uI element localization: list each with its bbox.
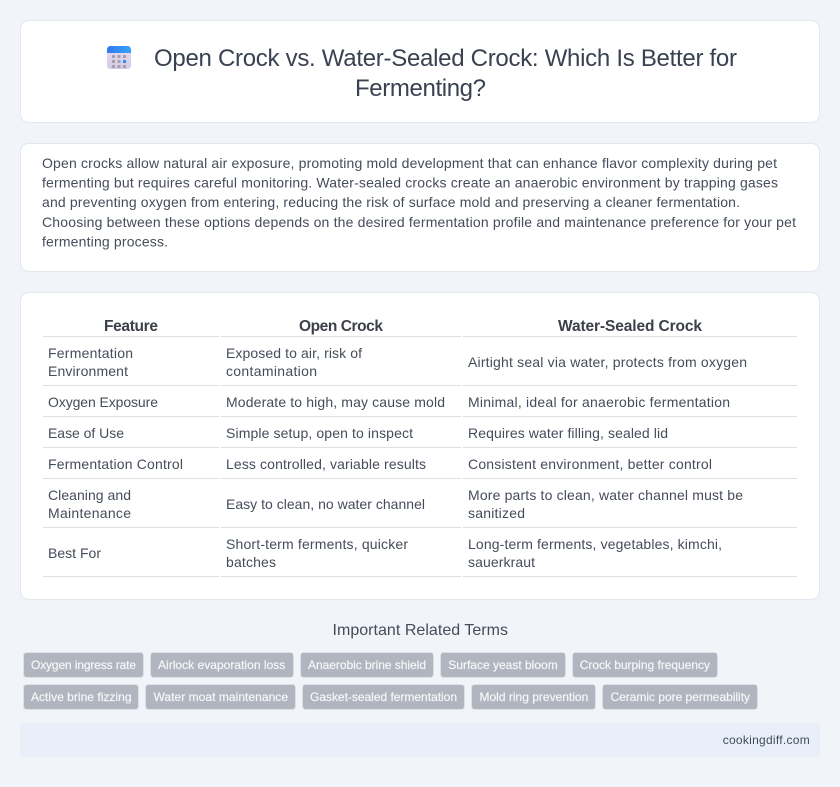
title: Open Crock vs. Water-Sealed Crock: Which Is Better for: [154, 45, 737, 72]
row: fermentation control: [43, 456, 797, 479]
title: [154, 45, 737, 102]
row: best for: batches: [226, 554, 276, 570]
summary text: [42, 155, 796, 249]
row: ease of use: [43, 425, 797, 448]
row: fermentation environment: Fermentation: [48, 345, 133, 361]
summary text: and preventing oxygen from entering, reducing the risk of surface mold and preserving a cleaner fermentation.: [42, 194, 740, 210]
summary text: fermenting process.: [42, 233, 168, 249]
row: best for: Long-term ferments, vegetables, kimchi,: [468, 536, 722, 552]
tag: anaerobic brine shield: [300, 652, 434, 678]
header panel: [20, 20, 820, 122]
row: cleaning and maintenance: Easy to clean, no water channel: [226, 496, 425, 512]
tag: gasket-sealed fermentation: [302, 684, 464, 710]
tag: anaerobic brine shield: Anaerobic brine shield: [308, 658, 426, 672]
row: cleaning and maintenance: sanitized: [468, 505, 525, 521]
table header row: [43, 318, 797, 337]
tag: ceramic pore permeability: [602, 684, 758, 710]
footer source text: cookingdiff.com: [723, 733, 810, 747]
tag: crock burping frequency: Crock burping frequency: [580, 658, 710, 672]
footer bar: [20, 723, 820, 757]
heading: important related terms: Important Related Terms: [332, 622, 508, 639]
row: cleaning and maintenance: Maintenance: [48, 505, 131, 521]
row: fermentation environment: contamination: [226, 363, 317, 379]
title: Fermenting?: [355, 75, 486, 102]
tag: gasket-sealed fermentation: Gasket-sealed fermentation: [310, 690, 457, 704]
panel: comparison table: [20, 292, 820, 600]
row: cleaning and maintenance: Cleaning and: [48, 487, 131, 503]
tag: surface yeast bloom: Surface yeast bloom: [448, 658, 558, 672]
row: ease of use: Simple setup, open to inspect: [226, 425, 413, 441]
tag: water moat maintenance: Water moat maintenance: [154, 690, 288, 704]
summary text: Open crocks allow natural air exposure, promoting mold development that can enhance flavor complexity during pet: [42, 155, 777, 171]
row: oxygen exposure: Oxygen Exposure: [48, 394, 158, 410]
row: fermentation control: Fermentation Control: [48, 456, 183, 472]
panel: summary paragraph: [20, 144, 820, 272]
table header row: Feature: [104, 318, 158, 335]
row: fermentation control: Consistent environment, better control: [468, 456, 712, 472]
tag: active brine fizzing: Active brine fizzing: [31, 690, 132, 704]
row: fermentation environment: Exposed to air, risk of: [226, 345, 362, 361]
row: best for: sauerkraut: [468, 554, 535, 570]
tag: oxygen ingress rate: Oxygen ingress rate: [31, 658, 136, 672]
row: cleaning and maintenance: [43, 487, 797, 528]
row: fermentation environment: Airtight seal via water, protects from oxygen: [468, 354, 747, 370]
tag: mold ring prevention: [472, 684, 596, 710]
tag: crock burping frequency: [572, 652, 718, 678]
row: ease of use: Ease of Use: [48, 425, 124, 441]
tag: water moat maintenance: [146, 684, 296, 710]
row: fermentation environment: [43, 345, 797, 386]
row: oxygen exposure: Moderate to high, may cause mold: [226, 394, 445, 410]
row: ease of use: Requires water filling, sealed lid: [468, 425, 668, 441]
row: best for: Best For: [48, 545, 101, 561]
tag: oxygen ingress rate: [24, 652, 144, 678]
tag: surface yeast bloom: [440, 652, 566, 678]
row: fermentation control: Less controlled, variable results: [226, 456, 426, 472]
tag: airlock evaporation loss: [150, 652, 294, 678]
row: best for: Short-term ferments, quicker: [226, 536, 408, 552]
tag: active brine fizzing: [24, 684, 138, 710]
summary text: Choosing between these options depends on the desired fermentation profile and maintenance preference for your pet: [42, 214, 796, 230]
row: oxygen exposure: [43, 394, 797, 417]
row: cleaning and maintenance: More parts to clean, water channel must be: [468, 487, 743, 503]
tag: airlock evaporation loss: Airlock evaporation loss: [158, 658, 285, 672]
icon: calendar: [107, 46, 131, 69]
summary text: fermenting but requires careful monitoring. Water-sealed crocks create an anaerobic environment by trapping gases: [42, 175, 778, 191]
table header row: Water-Sealed Crock: [558, 318, 702, 335]
tag list: [24, 652, 758, 710]
row: best for: [43, 536, 797, 577]
tag: mold ring prevention: Mold ring prevention: [480, 690, 588, 704]
row: oxygen exposure: Minimal, ideal for anaerobic fermentation: [468, 394, 730, 410]
table header row: Open Crock: [299, 318, 383, 335]
tag: ceramic pore permeability: Ceramic pore permeability: [610, 690, 750, 704]
row: fermentation environment: Environment: [48, 363, 128, 379]
